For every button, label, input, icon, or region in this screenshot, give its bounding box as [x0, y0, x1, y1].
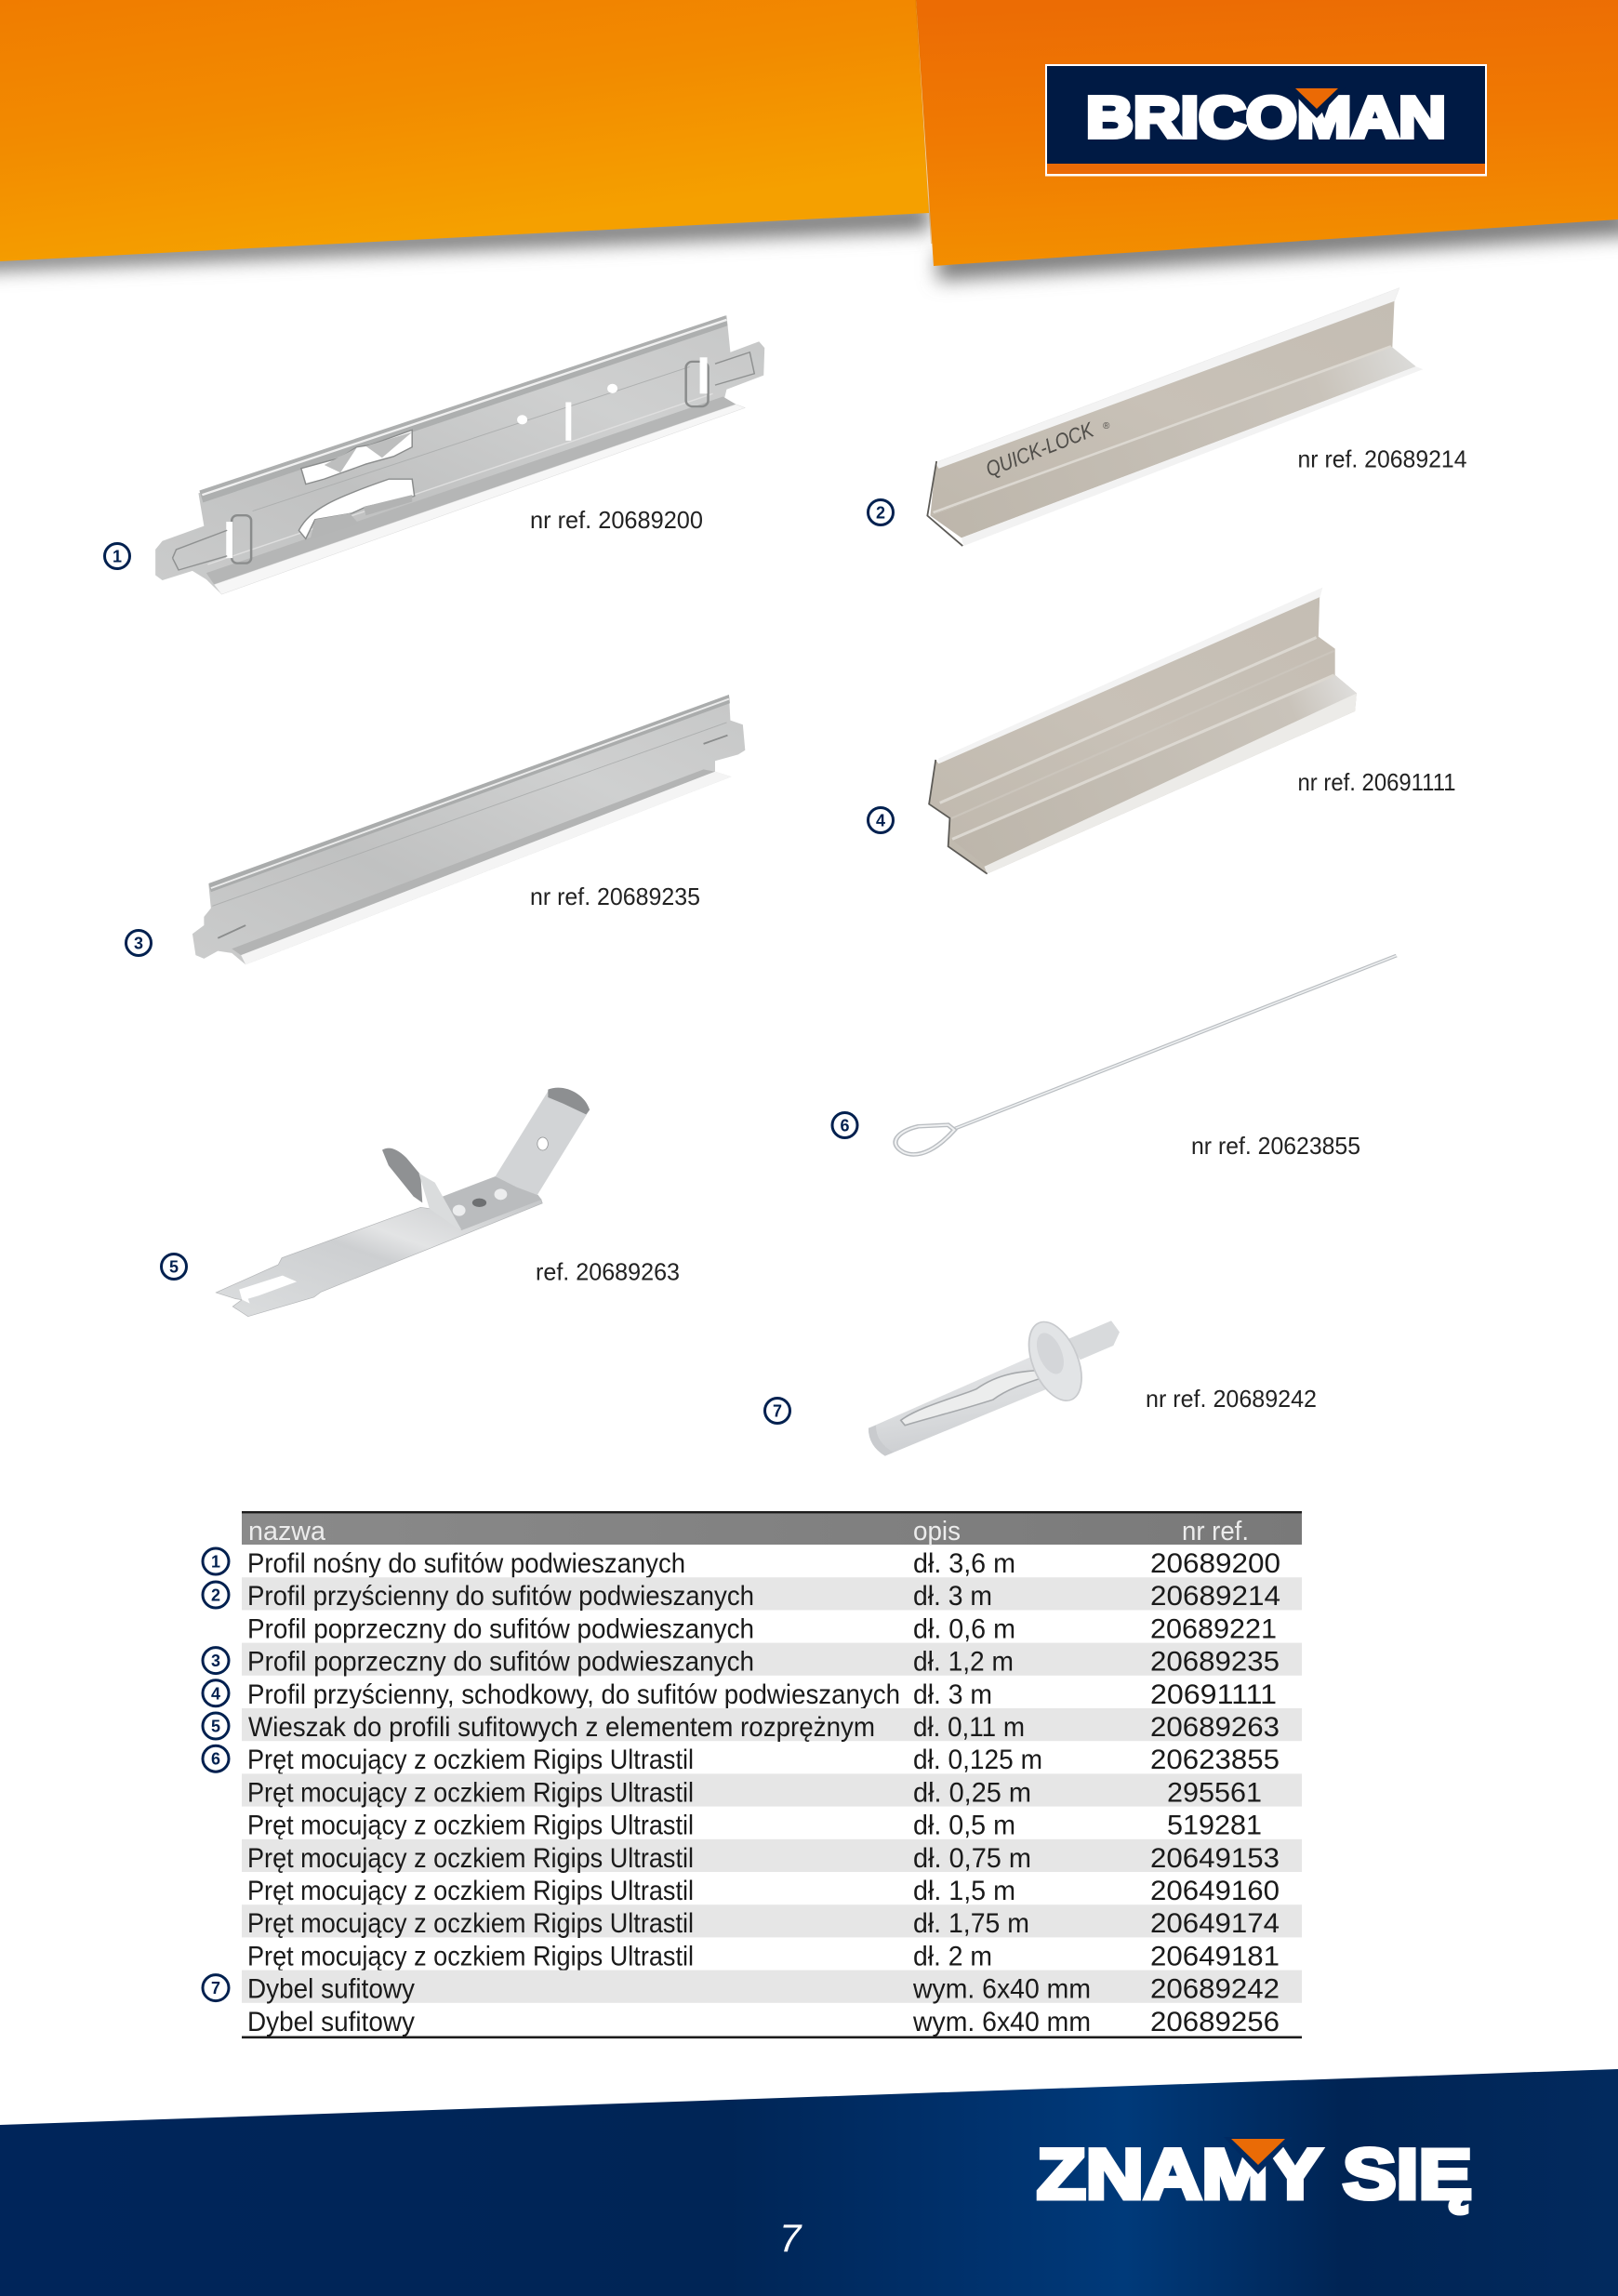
- product 7: ceiling anchor: [869, 1316, 1120, 1456]
- row 9: Pręt mocujący z oczkiem Rigips Ultrastil: [247, 1811, 694, 1841]
- row 15: 20689256: [1150, 2007, 1280, 2037]
- row 8: 295561: [1167, 1777, 1262, 1808]
- product 2: QUICK-LOCK wall profile: QUICK-LOCK: [982, 417, 1098, 482]
- row 5: [203, 1679, 1277, 1710]
- marker 7: [764, 1399, 790, 1423]
- row 7: dł. 0,125 m: [913, 1745, 1042, 1775]
- row 3: 20689221: [1150, 1613, 1277, 1644]
- label: nr ref. 20689242: nr ref. 20689242: [1146, 1385, 1317, 1413]
- header band: [0, 0, 1618, 281]
- row 13: 20649181: [1150, 1941, 1280, 1971]
- table header: opis: [913, 1517, 961, 1546]
- row 2: 2: [211, 1586, 220, 1605]
- row 8: [242, 1773, 1302, 1808]
- row 12: dł. 1,75 m: [913, 1908, 1029, 1939]
- row 5: Profil przyścienny, schodkowy, do sufitów podwieszanych: [247, 1679, 900, 1710]
- table header: nazwa: [248, 1517, 326, 1546]
- product 6: rod with eye: [895, 956, 1397, 1154]
- row 1: 1: [211, 1553, 220, 1572]
- row 6: dł. 0,11 m: [913, 1712, 1025, 1743]
- row 3: dł. 0,6 m: [913, 1613, 1015, 1644]
- left orange panel: [0, 0, 929, 261]
- product 2: QUICK-LOCK wall profile: [927, 288, 1423, 546]
- row 7: 6: [211, 1750, 220, 1769]
- row 14: 7: [211, 1979, 220, 1997]
- product 3: cross ceiling profile: [192, 695, 745, 964]
- row 13: dł. 2 m: [913, 1941, 992, 1971]
- row 11: dł. 1,5 m: [913, 1876, 1015, 1906]
- label: ref. 20689263: ref. 20689263: [536, 1258, 680, 1286]
- row 1: dł. 3,6 m: [913, 1548, 1015, 1579]
- label: nr ref. 20689200: nr ref. 20689200: [530, 506, 703, 534]
- row 4: 20689235: [1150, 1647, 1280, 1678]
- marker 7: 7: [773, 1402, 782, 1421]
- row 4: 3: [211, 1652, 220, 1670]
- marker 4: [869, 807, 893, 833]
- row 14: [203, 1971, 1302, 2005]
- marker 6: 6: [840, 1116, 850, 1135]
- row 9: 519281: [1167, 1811, 1262, 1841]
- table header: [242, 1511, 1302, 1546]
- row 14: wym. 6x40 mm: [912, 1974, 1091, 2005]
- row 15: Dybel sufitowy: [247, 2007, 415, 2037]
- row 12: [242, 1904, 1302, 1939]
- row 8: dł. 0,25 m: [913, 1777, 1031, 1808]
- product 1: main ceiling profile: [155, 315, 764, 594]
- product 5: hanger with expansion element: [216, 1088, 590, 1317]
- row 13: [247, 1941, 1280, 1971]
- row 5: 4: [211, 1684, 220, 1703]
- row 2: dł. 3 m: [913, 1581, 992, 1612]
- logo: Bricoman: [1045, 64, 1487, 177]
- product table: [203, 1511, 1302, 2038]
- row 6: [203, 1708, 1302, 1743]
- right orange panel: [916, 0, 1618, 266]
- marker 2: 2: [876, 504, 885, 523]
- marker 5: 5: [169, 1257, 179, 1276]
- marker 3: 3: [134, 934, 143, 952]
- row 5: 20691111: [1150, 1679, 1277, 1710]
- marker 6: [832, 1112, 857, 1138]
- row 14: 20689242: [1150, 1974, 1280, 2005]
- row 10: dł. 0,75 m: [913, 1843, 1031, 1874]
- marker 2: [869, 500, 893, 524]
- product 4: stepped wall profile: [929, 588, 1357, 874]
- page number: 7: [779, 2216, 802, 2260]
- row 6: Wieszak do profili sufitowych z elementem rozprężnym: [248, 1712, 875, 1743]
- row 4: Profil poprzeczny do sufitów podwieszanych: [247, 1647, 754, 1678]
- row 1: [203, 1548, 1280, 1579]
- row 10: Pręt mocujący z oczkiem Rigips Ultrastil: [247, 1843, 694, 1874]
- table header: nr ref.: [1182, 1517, 1249, 1546]
- logo: Bricoman: BRICOMAN: [1086, 86, 1446, 151]
- row 9: dł. 0,5 m: [913, 1811, 1015, 1841]
- row 6: 5: [211, 1717, 220, 1735]
- row 2: 20689214: [1150, 1581, 1280, 1612]
- row 2: [203, 1577, 1302, 1612]
- row 15: [242, 2007, 1302, 2038]
- footer band: [0, 2069, 1618, 2296]
- row 5: dł. 3 m: [913, 1679, 992, 1710]
- row 3: [247, 1613, 1277, 1644]
- marker 5: [162, 1254, 186, 1280]
- row 15: wym. 6x40 mm: [912, 2007, 1091, 2037]
- marker 1: [104, 543, 130, 569]
- slogan: ZNAMY SIĘ: ZNAMY SIĘ: [1037, 2135, 1472, 2214]
- label: nr ref. 20689235: nr ref. 20689235: [530, 883, 700, 910]
- row 3: Profil poprzeczny do sufitów podwieszanych: [247, 1613, 754, 1644]
- product 2: QUICK-LOCK wall profile: ®: [1103, 421, 1110, 431]
- row 4: dł. 1,2 m: [913, 1647, 1014, 1678]
- label: nr ref. 20689214: nr ref. 20689214: [1298, 445, 1467, 472]
- row 8: Pręt mocujący z oczkiem Rigips Ultrastil: [247, 1777, 694, 1808]
- row 9: [247, 1811, 1262, 1841]
- row 7: [203, 1745, 1280, 1775]
- row 12: 20649174: [1150, 1908, 1280, 1939]
- row 10: 20649153: [1150, 1843, 1280, 1874]
- marker 3: [126, 930, 151, 956]
- row 11: 20649160: [1150, 1876, 1280, 1906]
- row 4: [203, 1643, 1302, 1678]
- row 14: Dybel sufitowy: [247, 1974, 415, 2005]
- marker 4: 4: [876, 811, 885, 829]
- row 7: 20623855: [1150, 1745, 1280, 1775]
- row 13: Pręt mocujący z oczkiem Rigips Ultrastil: [247, 1941, 694, 1971]
- row 7: Pręt mocujący z oczkiem Rigips Ultrastil: [247, 1745, 694, 1775]
- row 6: 20689263: [1150, 1712, 1280, 1743]
- row 2: Profil przyścienny do sufitów podwieszanych: [247, 1581, 754, 1612]
- row 12: Pręt mocujący z oczkiem Rigips Ultrastil: [247, 1908, 694, 1939]
- label: nr ref. 20623855: nr ref. 20623855: [1191, 1132, 1360, 1160]
- row 1: Profil nośny do sufitów podwieszanych: [247, 1548, 685, 1579]
- label: nr ref. 20691111: nr ref. 20691111: [1298, 768, 1456, 796]
- row 11: Pręt mocujący z oczkiem Rigips Ultrastil: [247, 1876, 694, 1906]
- row 1: 20689200: [1150, 1548, 1280, 1579]
- row 11: [247, 1876, 1280, 1906]
- row 10: [242, 1839, 1302, 1874]
- marker 1: 1: [113, 547, 122, 565]
